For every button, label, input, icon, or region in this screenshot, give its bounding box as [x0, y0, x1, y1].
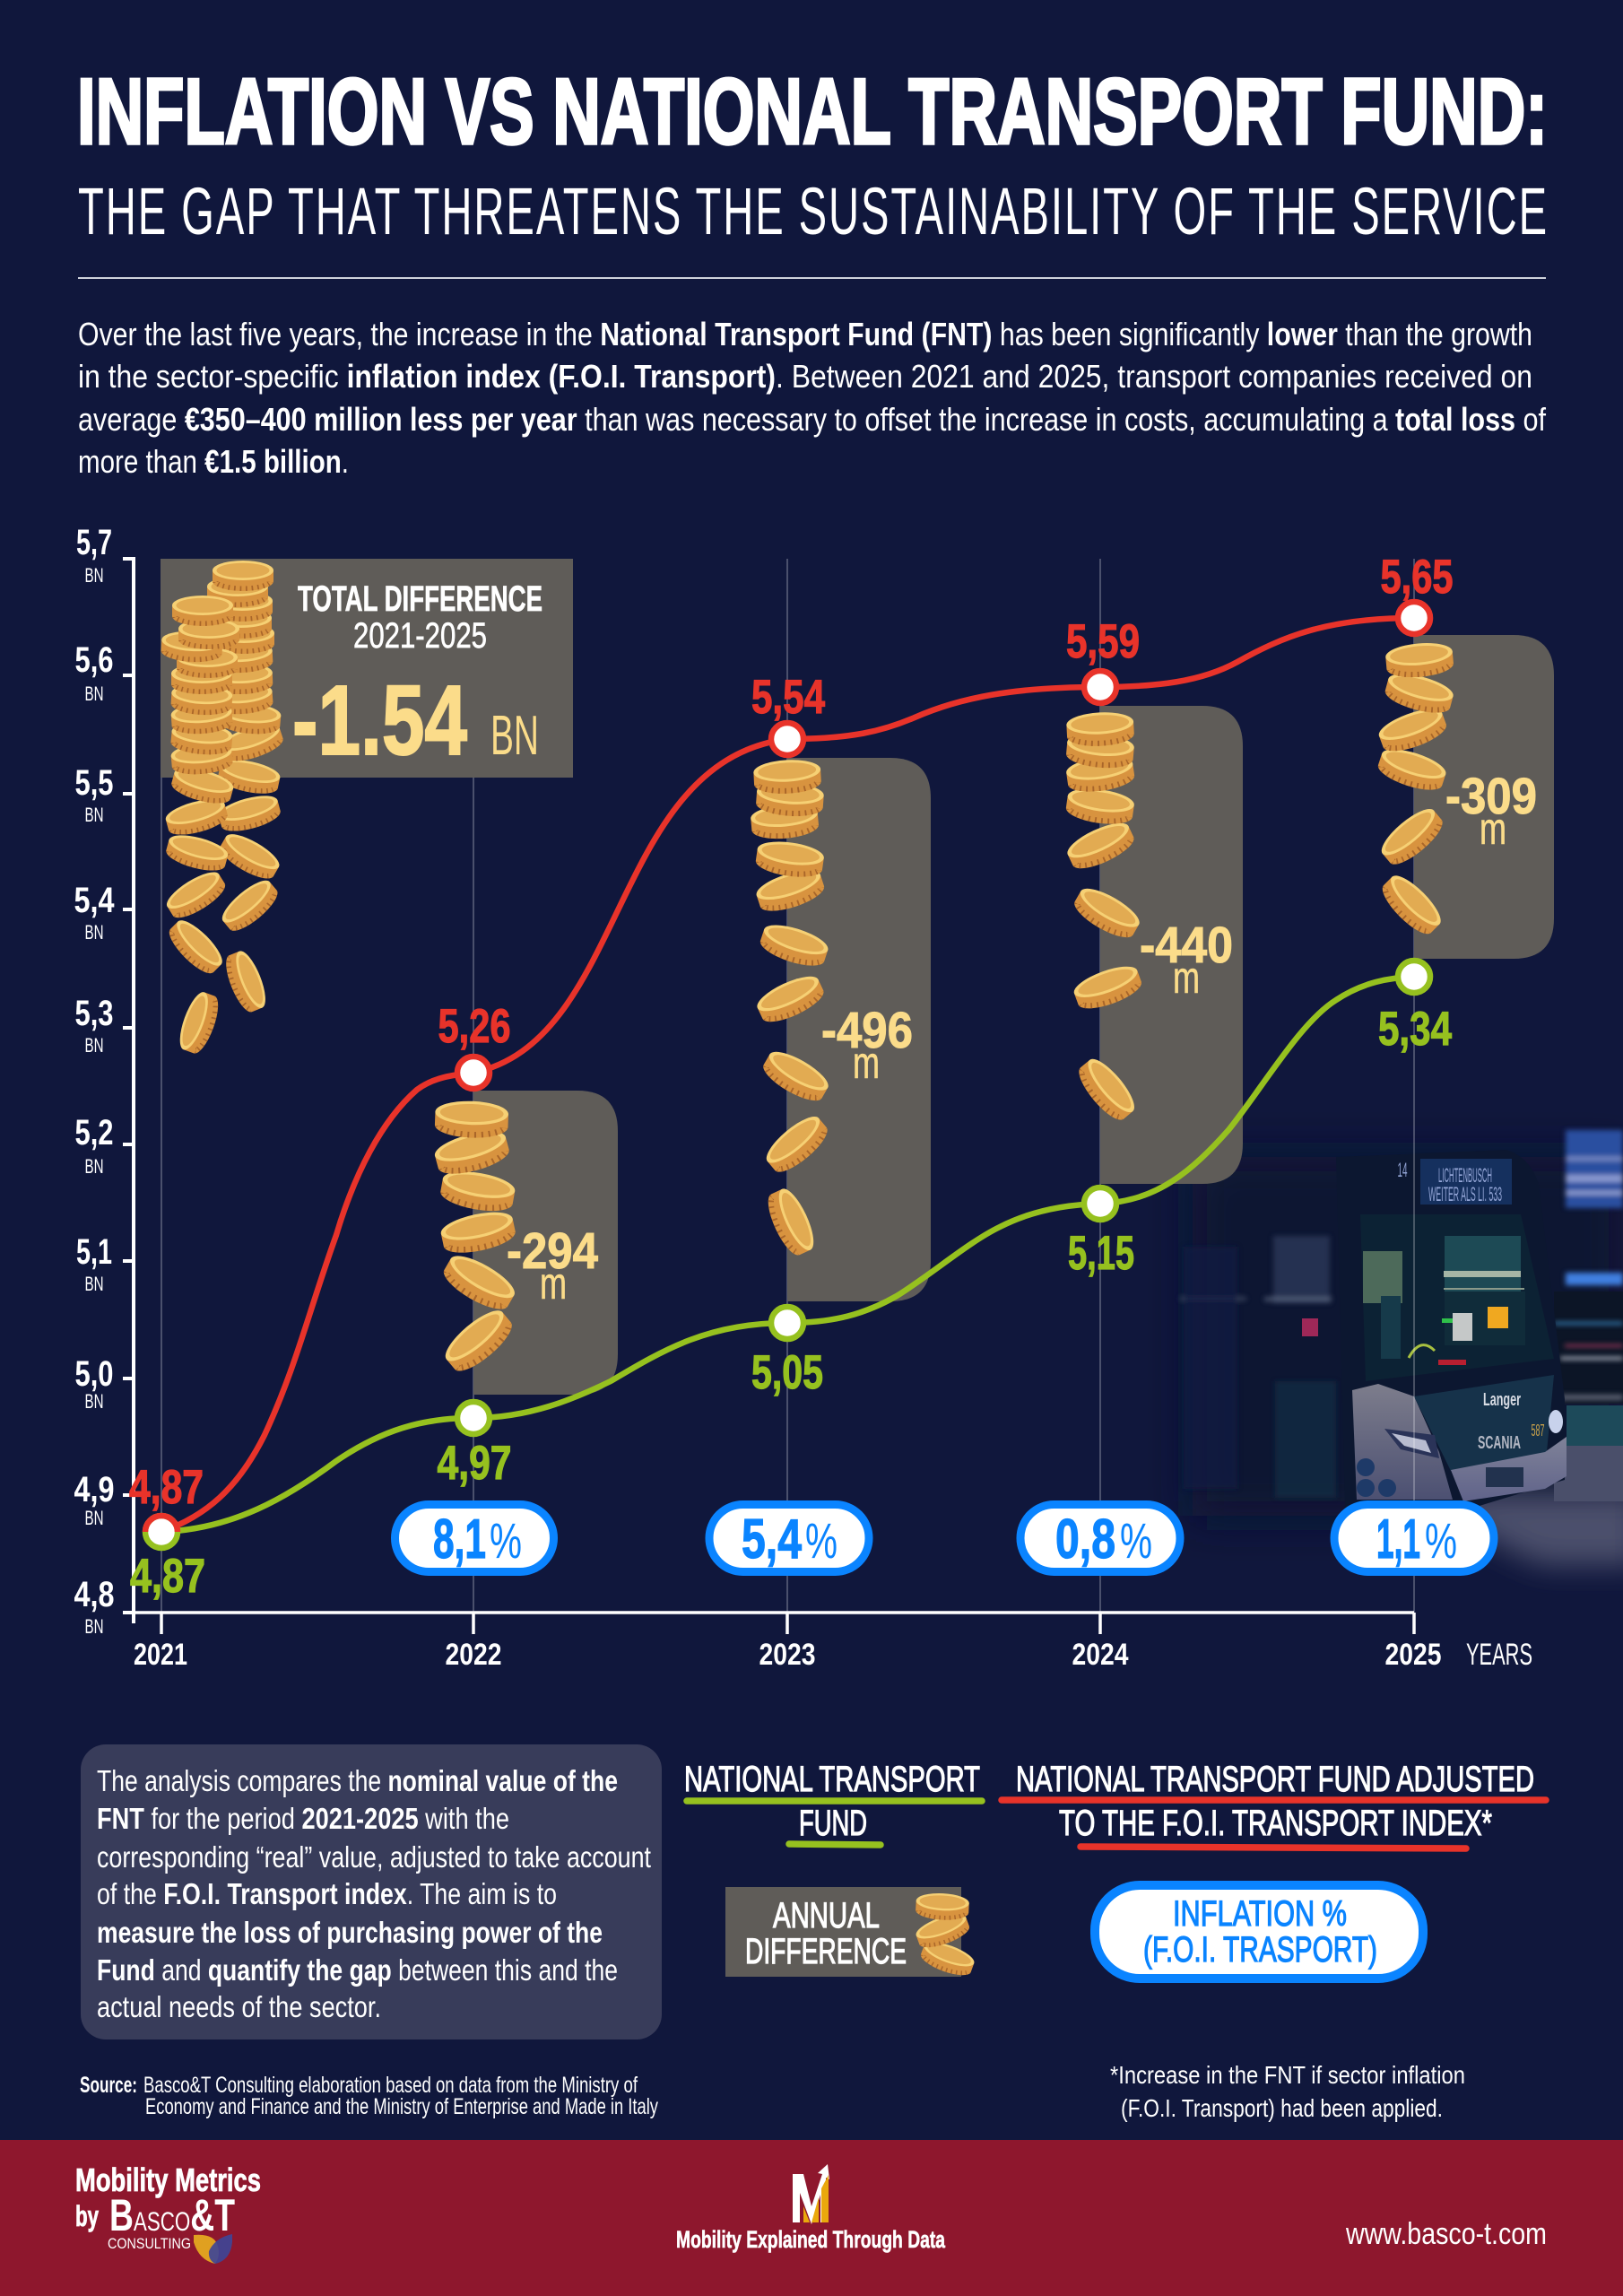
y axis labels: BN — [84, 1615, 104, 1638]
annual difference box 2022: -294 — [507, 1222, 598, 1280]
red value labels: 4,87 — [129, 1461, 204, 1514]
annual difference box 2022: m — [540, 1258, 567, 1309]
red value labels: 5,26 — [438, 1000, 511, 1053]
y axis labels: 5,7 — [76, 523, 112, 562]
legend: annual difference: DIFFERENCE — [745, 1932, 907, 1971]
green points — [145, 961, 1430, 1548]
y axis labels: 4,9 — [74, 1470, 115, 1509]
y axis labels: BN — [84, 683, 104, 705]
annual difference box 2024 — [1100, 706, 1243, 1184]
chart — [74, 523, 1554, 1672]
x axis labels: 2024 — [1072, 1638, 1129, 1672]
y axis labels: BN — [84, 1507, 104, 1529]
annual difference box 2025: m — [1480, 804, 1506, 854]
x axis labels: 2022 — [445, 1638, 502, 1672]
photo: night bus: 587 — [1532, 1422, 1544, 1439]
footnote: (F.O.I. Transport) had been applied. — [1121, 2094, 1443, 2122]
panel: total difference: BN — [490, 705, 539, 767]
y axis labels: 5,2 — [75, 1113, 113, 1152]
panel: methodology note: FNT for the period 2021-2025 with the — [97, 1802, 509, 1835]
photo: night bus — [1180, 1130, 1623, 1565]
y axis labels: 5,6 — [75, 640, 113, 680]
annual difference box 2025 — [1414, 635, 1554, 959]
y axis labels: BN — [84, 1390, 104, 1413]
line: adjusted fund (red) — [161, 618, 1414, 1532]
panel: total difference: -1.54 — [292, 665, 467, 776]
footnote: *Increase in the FNT if sector inflation — [1110, 2061, 1465, 2089]
footer logo: mobility metrics by basco&t: Mobility Metrics — [75, 2161, 261, 2198]
intro paragraph: more than €1.5 billion. — [78, 443, 349, 480]
inflation pill 2024 — [1020, 1505, 1180, 1571]
inflation pill 2025: % — [1425, 1512, 1457, 1569]
red value labels: 5,65 — [1381, 551, 1453, 604]
source — [80, 2073, 658, 2119]
x axis — [134, 1613, 1414, 1634]
green value labels: 5,05 — [751, 1346, 823, 1399]
legend: annual difference: ANNUAL — [773, 1896, 880, 1935]
x axis labels: 2025 — [1384, 1638, 1442, 1672]
panel: methodology note: corresponding “real” value, adjusted to take account — [97, 1840, 651, 1874]
annual difference box 2024: m — [1173, 952, 1200, 1003]
legend: national transport fund: NATIONAL TRANSPORT — [684, 1760, 980, 1799]
y axis labels: BN — [84, 1034, 104, 1057]
inflation pill 2025: 1,1 — [1376, 1509, 1420, 1570]
legend: inflation: (F.O.I. TRASPORT) — [1143, 1930, 1377, 1970]
inflation pill 2024: % — [1120, 1512, 1152, 1569]
footer logo: mobility metrics by basco&t: by — [75, 2200, 99, 2232]
y axis labels: 5,1 — [76, 1232, 112, 1272]
y axis labels — [74, 523, 115, 1638]
inflation pill 2022: % — [490, 1512, 522, 1569]
inflation pill 2024: 0,8 — [1055, 1509, 1115, 1570]
red value labels: 5,54 — [751, 671, 825, 724]
intro paragraph: Over the last five years, the increase in the National Transport Fund (FNT) has been significantly lower than the growth — [78, 316, 1532, 352]
green value labels: 5,34 — [1378, 1003, 1452, 1056]
x axis labels: 2023 — [759, 1638, 816, 1672]
source: Economy and Finance and the Ministry of Enterprise and Made in Italy — [145, 2094, 658, 2119]
panel: methodology note: The analysis compares the nominal value of the — [97, 1764, 618, 1797]
intro paragraph: in the sector-specific inflation index (F.O.I. Transport). Between 2021 and 2025, transport companies received on — [78, 358, 1532, 395]
inflation pill 2023: 5,4 — [742, 1509, 802, 1570]
windshield — [1360, 1214, 1554, 1381]
bus front panel — [1414, 1375, 1554, 1471]
footer tagline: Mobility Explained Through Data — [676, 2226, 946, 2253]
y axis labels: 5,4 — [74, 881, 115, 920]
annual difference box 2025: -309 — [1445, 768, 1537, 825]
legend: inflation — [1095, 1885, 1423, 1979]
inflation pill 2025 — [1334, 1505, 1494, 1571]
footer logo: mobility metrics by basco&t: BASCO&T — [109, 2190, 235, 2240]
panel: methodology note: of the F.O.I. Transport index. The aim is to — [97, 1877, 557, 1910]
annual difference box 2022 — [473, 1091, 618, 1395]
red points — [145, 602, 1430, 1532]
annual difference box 2023: -496 — [821, 1002, 913, 1059]
x axis labels — [134, 1638, 1532, 1672]
panel: total difference: TOTAL DIFFERENCE — [298, 579, 542, 619]
green value labels: 5,15 — [1068, 1227, 1134, 1280]
footer band — [0, 2140, 1623, 2296]
coins: 2024 — [1063, 710, 1145, 1126]
bus lettering — [1478, 1390, 1544, 1453]
inflation pill 2023 — [709, 1505, 869, 1571]
footer logo: mobility metrics by basco&t — [75, 2161, 261, 2264]
annual difference box 2024: -440 — [1140, 917, 1233, 974]
legend: inflation: INFLATION % — [1173, 1894, 1347, 1934]
panel: methodology note: actual needs of the sector. — [97, 1990, 381, 2023]
year grid lines — [161, 559, 1414, 1613]
green value labels: 4,97 — [438, 1437, 511, 1490]
photo: night bus: WEITER ALS LI. 533 — [1428, 1183, 1502, 1205]
panel: methodology note: measure the loss of purchasing power of the — [97, 1916, 603, 1949]
destination sign — [1397, 1159, 1512, 1205]
red value labels — [129, 551, 1453, 1514]
panel: total difference: 2021-2025 — [353, 616, 487, 656]
coins: 2022 — [432, 1100, 520, 1379]
legend: national transport fund — [684, 1760, 982, 1845]
coins: total difference pile — [161, 561, 286, 1057]
footer logo: M mark — [793, 2164, 829, 2224]
panel: methodology note: Fund and quantify the gap between this and the — [97, 1953, 618, 1987]
bus lettering: SCANIA — [1478, 1433, 1521, 1453]
annual difference box 2023 — [787, 758, 931, 1301]
bus lettering: Langer — [1483, 1390, 1521, 1410]
inflation pill 2023: % — [805, 1512, 838, 1569]
website: www.basco-t.com — [1345, 2217, 1547, 2251]
legend: annual difference — [725, 1887, 977, 1981]
source: Source: — [80, 2073, 137, 2098]
legend: adjusted fund — [1002, 1760, 1546, 1848]
coins: 2023 — [750, 758, 834, 1260]
red value labels: 5,59 — [1066, 615, 1140, 668]
line: national transport fund (green) — [161, 977, 1414, 1532]
y axis labels: 5,0 — [75, 1354, 113, 1394]
legend: national transport fund: FUND — [799, 1804, 867, 1843]
footer logo: mobility metrics by basco&t: CONSULTING — [108, 2235, 191, 2252]
inflation pill 2022: 8,1 — [433, 1509, 486, 1570]
coins: 2025 — [1375, 640, 1456, 941]
bus body — [1336, 1150, 1565, 1509]
y axis — [123, 559, 134, 1623]
inflation pill 2022 — [395, 1505, 554, 1571]
x axis labels: YEARS — [1466, 1638, 1532, 1672]
y axis labels: 5,5 — [75, 763, 113, 803]
destination sign: 14 — [1397, 1159, 1408, 1181]
y axis labels: 4,8 — [74, 1575, 115, 1614]
green value labels — [130, 1003, 1452, 1603]
y axis labels: BN — [84, 1155, 104, 1178]
y axis labels: BN — [84, 804, 104, 826]
source: Basco&T Consulting elaboration based on data from the Ministry of — [143, 2073, 638, 2098]
y axis labels: BN — [84, 921, 104, 944]
intro paragraph — [78, 316, 1547, 480]
photo: night bus: LICHTENBUSCH — [1438, 1164, 1492, 1187]
y axis labels: 5,3 — [75, 994, 113, 1033]
annual difference box 2023: m — [853, 1038, 880, 1088]
footnote — [1110, 2061, 1465, 2122]
panel: total difference — [161, 559, 573, 778]
panel: methodology note — [81, 1744, 662, 2039]
green value labels: 4,87 — [130, 1550, 205, 1603]
y axis labels: BN — [84, 564, 104, 587]
x axis labels: 2021 — [134, 1638, 187, 1672]
intro paragraph: average €350–400 million less per year than was necessary to offset the increase in costs, accumulating a total loss of — [78, 401, 1547, 438]
y axis labels: BN — [84, 1273, 104, 1295]
